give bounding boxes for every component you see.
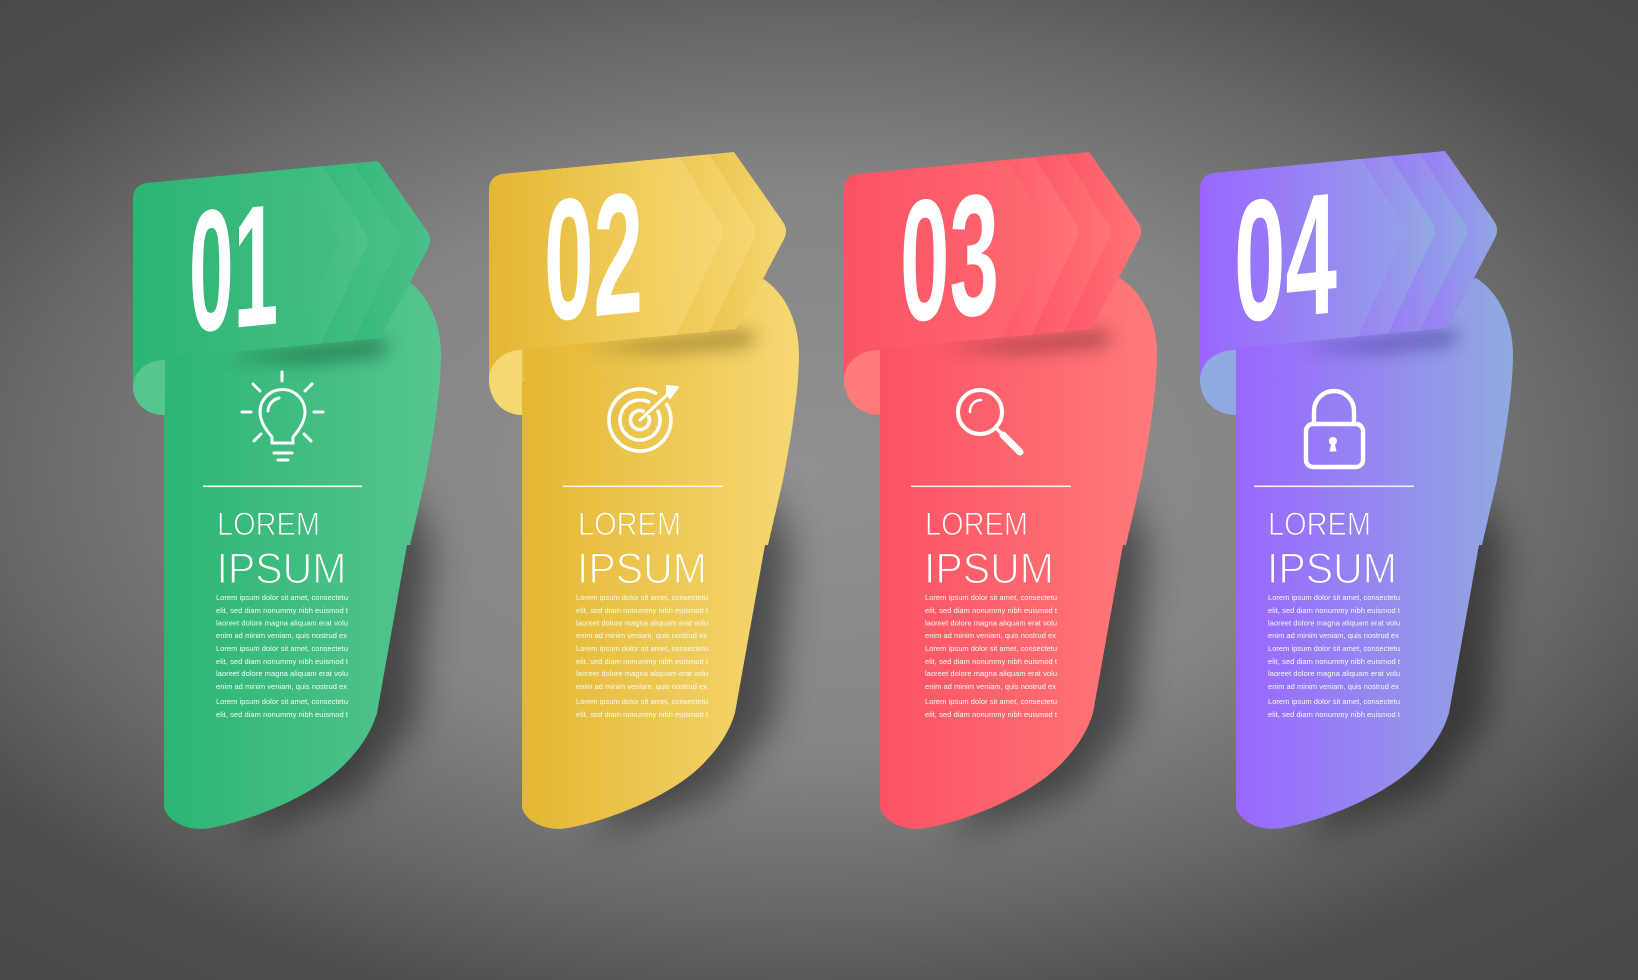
body text: Lorem ipsum dolor sit amet, consectetu bbox=[216, 644, 348, 653]
body text: Lorem ipsum dolor sit amet, consectetu bbox=[1268, 697, 1400, 706]
body text bbox=[576, 593, 709, 719]
heading: LOREM bbox=[578, 506, 681, 542]
body text: Lorem ipsum dolor sit amet, consectetu bbox=[925, 644, 1057, 653]
body text: elit, sed diam nonummy nibh euismod t bbox=[925, 657, 1058, 666]
body text: elit, sed diam nonummy nibh euismod t bbox=[1268, 657, 1401, 666]
divider bbox=[911, 486, 1071, 487]
body text: elit, sed diam nonummy nibh euismod t bbox=[216, 710, 349, 719]
body text: laoreet dolore magna aliquam erat volu bbox=[216, 618, 348, 628]
heading: IPSUM bbox=[577, 545, 707, 593]
card 04 body bbox=[1236, 278, 1513, 829]
card 03 chevron banner bbox=[843, 141, 1141, 383]
number 03: 03 bbox=[900, 158, 999, 360]
icon: target with arrow bbox=[609, 386, 678, 451]
body text: elit, sed diam nonummy nibh euismod t bbox=[1268, 606, 1401, 615]
heading: IPSUM bbox=[216, 545, 346, 593]
body text: elit, sed diam nonummy nibh euismod t bbox=[1268, 710, 1401, 719]
heading: LOREM bbox=[1268, 506, 1371, 542]
icon: padlock bbox=[1306, 391, 1363, 467]
body text: Lorem ipsum dolor sit amet, consectetu bbox=[576, 644, 708, 653]
body text: elit, sed diam nonummy nibh euismod t bbox=[216, 657, 349, 666]
number 02: 02 bbox=[544, 157, 643, 359]
body text: laoreet dolore magna aliquam erat volu bbox=[1268, 669, 1400, 678]
body text bbox=[925, 593, 1058, 719]
panel: card 01 bbox=[132, 150, 441, 838]
body text: laoreet dolore magna aliquam erat volu bbox=[216, 669, 348, 678]
body text: enim ad minim veniam, quis nostrud ex bbox=[1268, 631, 1399, 640]
card 03 body bbox=[880, 278, 1157, 829]
card 04 cast shadow bbox=[1306, 480, 1504, 838]
heading bbox=[924, 506, 1054, 593]
card 01 folded curl bbox=[133, 360, 165, 415]
heading: IPSUM bbox=[1267, 545, 1397, 593]
body text: Lorem ipsum dolor sit amet, consectetu bbox=[1268, 644, 1400, 653]
panel: card 02 bbox=[488, 141, 799, 838]
body text: Lorem ipsum dolor sit amet, consectetu bbox=[1268, 593, 1400, 602]
panel: card 04 bbox=[1199, 140, 1513, 838]
icon: light bulb bbox=[242, 372, 323, 460]
heading bbox=[577, 506, 707, 593]
card 02 cast shadow bbox=[592, 480, 790, 838]
card 04 chevron banner bbox=[1199, 140, 1497, 382]
body text: Lorem ipsum dolor sit amet, consectetu bbox=[216, 697, 348, 706]
card 02 folded curl bbox=[489, 350, 522, 415]
body text: laoreet dolore magna aliquam erat volu bbox=[1268, 618, 1400, 628]
body text: elit, sed diam nonummy nibh euismod t bbox=[925, 710, 1058, 719]
panel: card 03 bbox=[843, 141, 1157, 838]
body text: laoreet dolore magna aliquam erat volu bbox=[925, 618, 1057, 628]
body text: enim ad minim veniam, quis nostrud ex bbox=[925, 631, 1056, 640]
icon: magnifying glass bbox=[958, 390, 1020, 452]
body text: elit, sed diam nonummy nibh euismod t bbox=[576, 657, 709, 666]
body text bbox=[216, 593, 349, 719]
heading: LOREM bbox=[217, 506, 320, 542]
body text: elit, sed diam nonummy nibh euismod t bbox=[925, 606, 1058, 615]
card 01 chevron banner bbox=[132, 150, 430, 392]
divider bbox=[563, 486, 723, 487]
body text: enim ad minim veniam, quis nostrud ex bbox=[216, 682, 347, 691]
divider bbox=[203, 486, 362, 487]
heading: IPSUM bbox=[924, 545, 1054, 593]
number 04: 04 bbox=[1234, 156, 1337, 359]
card 01 body bbox=[164, 278, 441, 829]
body text: elit, sed diam nonummy nibh euismod t bbox=[576, 606, 709, 615]
card 03 cast shadow bbox=[950, 480, 1148, 838]
card 03 folded curl bbox=[844, 350, 880, 415]
body text: Lorem ipsum dolor sit amet, consectetu bbox=[576, 593, 708, 602]
card 01 cast shadow bbox=[234, 480, 432, 838]
number 01: 01 bbox=[189, 167, 278, 369]
divider bbox=[1254, 486, 1414, 487]
body text: enim ad minim veniam, quis nostrud ex bbox=[1268, 682, 1399, 691]
body text: enim ad minim veniam, quis nostrud ex bbox=[576, 682, 707, 691]
body text: elit, sed diam nonummy nibh euismod t bbox=[576, 710, 709, 719]
body text: enim ad minim veniam, quis nostrud ex bbox=[925, 682, 1056, 691]
body text: enim ad minim veniam, quis nostrud ex bbox=[576, 631, 707, 640]
body text: elit, sed diam nonummy nibh euismod t bbox=[216, 606, 349, 615]
body text: Lorem ipsum dolor sit amet, consectetu bbox=[216, 593, 348, 602]
card 04 folded curl bbox=[1200, 350, 1236, 415]
body text: Lorem ipsum dolor sit amet, consectetu bbox=[925, 697, 1057, 706]
card 02 chevron banner bbox=[488, 141, 786, 383]
body text: enim ad minim veniam, quis nostrud ex bbox=[216, 631, 347, 640]
body text: laoreet dolore magna aliquam erat volu bbox=[576, 669, 708, 678]
heading: LOREM bbox=[925, 506, 1028, 542]
heading bbox=[216, 506, 346, 593]
body text bbox=[1268, 593, 1401, 719]
body text: laoreet dolore magna aliquam erat volu bbox=[925, 669, 1057, 678]
body text: Lorem ipsum dolor sit amet, consectetu bbox=[576, 697, 708, 706]
card 02 body bbox=[522, 278, 799, 829]
heading bbox=[1267, 506, 1397, 593]
body text: laoreet dolore magna aliquam erat volu bbox=[576, 618, 708, 628]
body text: Lorem ipsum dolor sit amet, consectetu bbox=[925, 593, 1057, 602]
